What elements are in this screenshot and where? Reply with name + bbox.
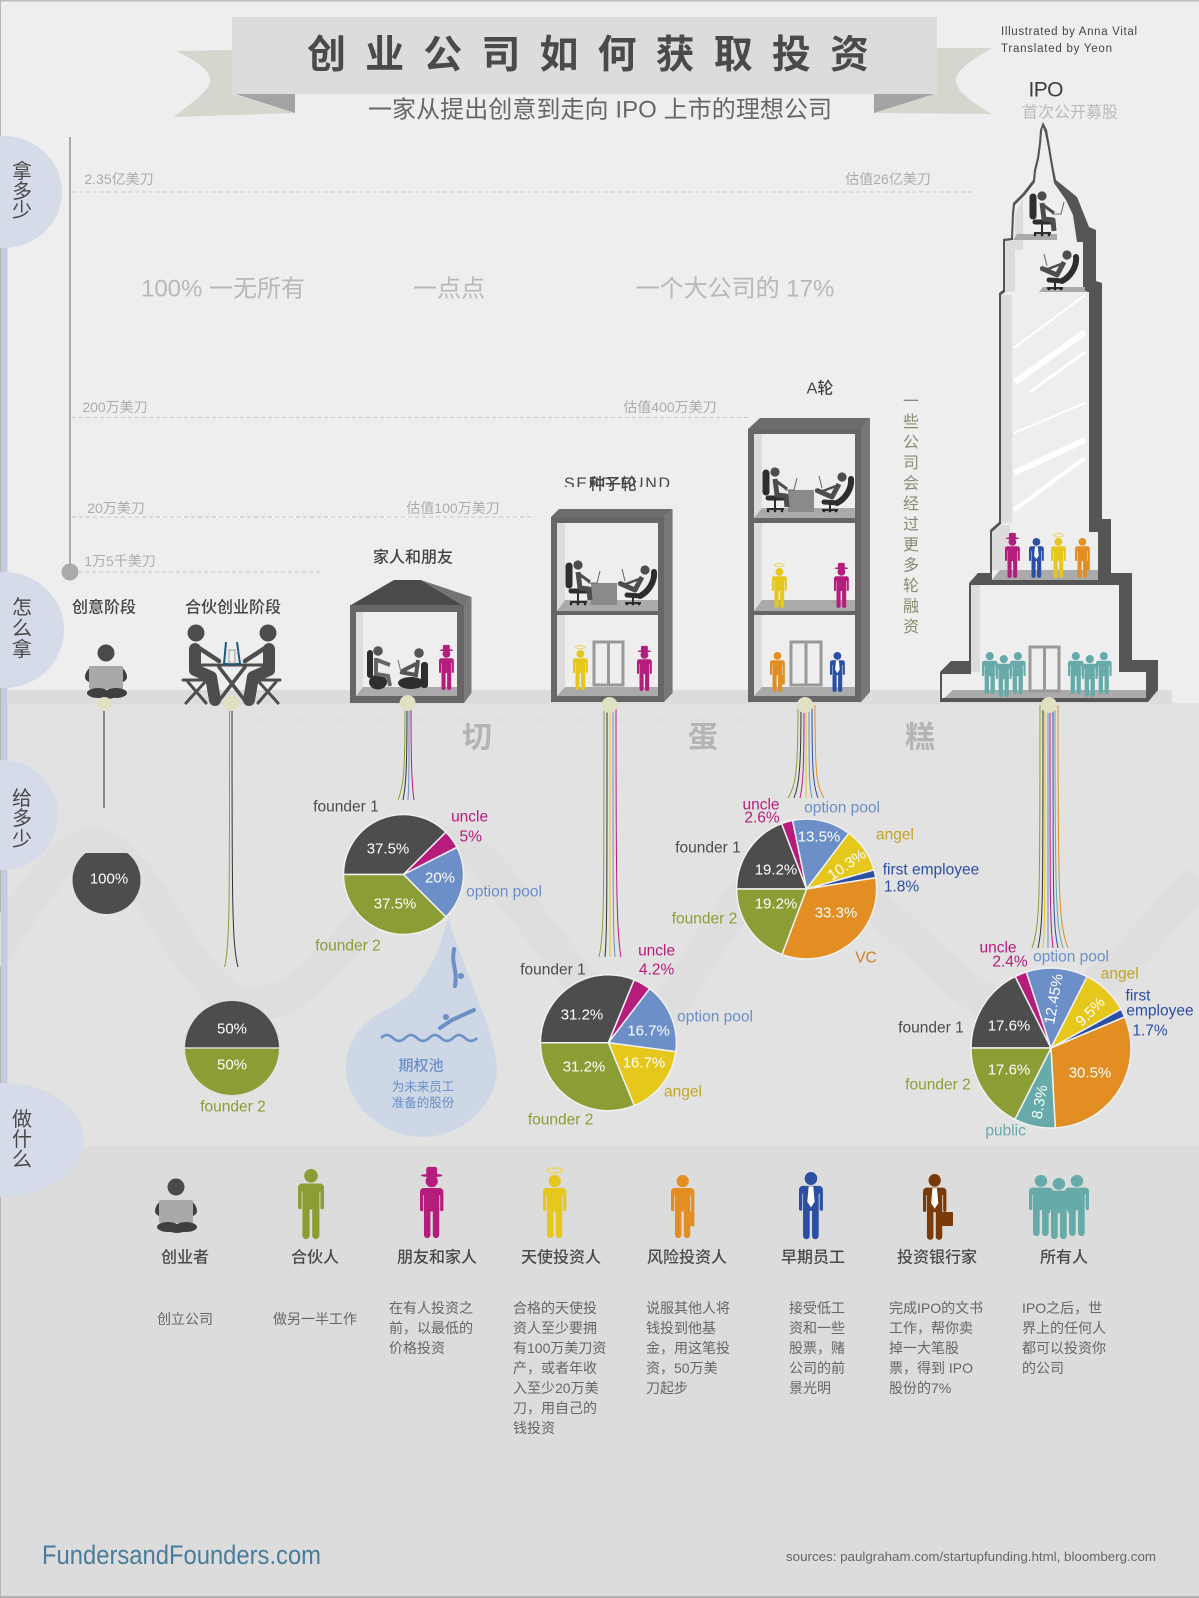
description: 合格的天使投 xyxy=(513,1300,597,1316)
funding amount labels: 1万5千美刀 xyxy=(84,553,156,569)
building: seed xyxy=(551,509,673,702)
pie: seed stage: 16.7% xyxy=(627,1022,670,1040)
desk xyxy=(788,490,814,512)
stage label: 合伙创业阶段 xyxy=(185,598,281,616)
description: 说服其他人将 xyxy=(646,1300,730,1316)
option pool title: 期权池 xyxy=(398,1058,444,1074)
description: 刀起步 xyxy=(646,1380,688,1396)
funding amount labels: 20万美刀 xyxy=(87,500,145,516)
option pool drop xyxy=(346,917,497,1137)
person: right founder on chair xyxy=(398,648,428,689)
description: 钱投到他基 xyxy=(646,1320,716,1336)
streams: co-founder xyxy=(225,705,238,967)
side tab: how to get xyxy=(0,572,64,688)
pie: series A stage: 10.3% xyxy=(825,846,869,884)
labels: first xyxy=(1126,988,1151,1004)
person: angel xyxy=(573,646,588,690)
funding amount labels: 200万美刀 xyxy=(82,399,148,415)
stage: IPO xyxy=(940,78,1158,702)
labels: employee xyxy=(1126,1002,1194,1020)
labels: VC xyxy=(855,950,877,966)
description xyxy=(646,1300,730,1396)
heading: 合伙人 xyxy=(291,1248,339,1266)
stage label: A轮 xyxy=(807,380,833,398)
pie: seed stage: 31.2% xyxy=(563,1058,605,1076)
side tab: how to get: 拿 xyxy=(12,637,32,661)
person: angel xyxy=(1051,534,1066,578)
pie: family stage: 37.5% xyxy=(367,840,409,858)
ribbon right fold xyxy=(874,94,934,113)
person: employee xyxy=(830,652,845,692)
pie: series A stage: 33.3% xyxy=(815,904,857,922)
labels: 2.6% xyxy=(744,810,780,826)
equity kept: 17 percent: 一个大公司的 17% xyxy=(636,276,834,302)
stage: series A xyxy=(748,380,870,702)
labels: 4.2% xyxy=(639,962,674,978)
labels: first employee xyxy=(883,862,979,878)
icon: co-founder xyxy=(298,1169,324,1239)
section heading: cut the cake: 蛋 xyxy=(688,722,718,754)
person: founder at desk xyxy=(1033,191,1064,236)
option pool description: 为未来员工 xyxy=(392,1080,454,1094)
pie: series A stage: 19.2% xyxy=(755,896,797,912)
section heading: cut the cake: 切 xyxy=(462,722,492,754)
description: 创立公司 xyxy=(157,1311,213,1327)
note: more rounds: 一 xyxy=(903,394,919,410)
description: 票，得到 IPO xyxy=(889,1360,973,1376)
legend: VC xyxy=(646,1175,730,1396)
stage label: 种子轮 xyxy=(589,476,637,494)
description: 景光明 xyxy=(789,1380,831,1396)
description: 前，以最低的 xyxy=(389,1320,473,1336)
door xyxy=(594,642,623,685)
labels: 5% xyxy=(459,828,482,846)
labels: 1.8% xyxy=(884,878,919,896)
left vertical bar xyxy=(1,245,8,1090)
description: 价格投资 xyxy=(389,1340,445,1356)
labels: founder 1 xyxy=(898,1020,964,1036)
pie: IPO stage xyxy=(898,940,1194,1140)
heading: 创业者 xyxy=(161,1248,209,1266)
description xyxy=(789,1300,845,1396)
labels: angel xyxy=(1101,966,1139,982)
description xyxy=(513,1300,606,1436)
labels: 2.4% xyxy=(992,954,1028,970)
side tab: how much give: 多 xyxy=(12,807,32,830)
funding axis xyxy=(62,137,78,580)
labels: option pool xyxy=(677,1008,753,1026)
stage: co-founder xyxy=(183,598,281,703)
description: 的公司 xyxy=(1022,1360,1064,1376)
side tab: what they do: 么 xyxy=(12,1149,32,1171)
dashed funding levels xyxy=(72,192,975,572)
ribbon right tail xyxy=(874,48,992,114)
labels: founder 1 xyxy=(675,840,741,856)
pie: IPO stage: 9.5% xyxy=(1072,994,1109,1030)
section heading: cut the cake: 糕 xyxy=(905,722,935,754)
labels: founder 2 xyxy=(672,910,737,928)
labels: angel xyxy=(664,1084,702,1100)
streams: seed xyxy=(599,705,621,957)
heading: 投资银行家 xyxy=(897,1248,977,1266)
description: 完成IPO的文书 xyxy=(889,1300,983,1316)
label: founder 2 xyxy=(200,1098,266,1116)
icon: everyone xyxy=(1029,1175,1089,1239)
heading: 所有人 xyxy=(1040,1248,1088,1266)
description: 都可以投资你 xyxy=(1022,1340,1106,1356)
funding amount labels: 2.35亿美刀 xyxy=(84,171,154,187)
funding amount labels: 估值26亿美刀 xyxy=(845,171,931,187)
funding amount labels xyxy=(82,171,931,569)
pie: co-founder stage: 50% xyxy=(217,1056,247,1074)
labels: uncle xyxy=(979,940,1017,956)
icon: swimmer xyxy=(440,1010,474,1028)
person: left founder on ottoman xyxy=(367,646,390,690)
building: skyscraper xyxy=(940,122,1158,702)
labels: option pool xyxy=(1033,948,1109,966)
description xyxy=(889,1300,983,1396)
labels xyxy=(313,798,542,954)
stage: idea xyxy=(72,598,136,699)
person: uncle with hat xyxy=(439,645,454,690)
title ribbon xyxy=(174,17,992,117)
legend: everyone xyxy=(1022,1175,1106,1376)
stage label overlap: SEED FUND xyxy=(564,476,670,492)
floors xyxy=(944,234,1146,698)
icon: founder xyxy=(155,1178,197,1233)
note: more rounds: 些 xyxy=(903,413,919,431)
person: employee xyxy=(1029,538,1044,578)
description: 资和一些 xyxy=(789,1320,845,1336)
note: more rounds xyxy=(903,394,919,636)
note: more rounds: 更 xyxy=(903,537,919,554)
funding amount labels: 估值400万美刀 xyxy=(623,399,717,415)
option pool description: 准备的股份 xyxy=(392,1095,455,1110)
description: 在有人投资之 xyxy=(389,1300,473,1316)
side tab: what they do xyxy=(0,1083,84,1197)
labels: option pool xyxy=(466,884,542,900)
side tab: how to get: 么 xyxy=(12,618,32,640)
person: VC xyxy=(1075,538,1090,578)
pie: series A stage xyxy=(672,796,979,966)
glass stripes xyxy=(1014,295,1085,510)
icon: uncle xyxy=(420,1167,443,1238)
description: 界上的任何人 xyxy=(1022,1320,1106,1336)
IPO heading: IPO xyxy=(1028,78,1064,102)
title: 创业公司如何获取投资 xyxy=(307,34,869,77)
note: more rounds: 司 xyxy=(903,455,919,472)
labels: public xyxy=(985,1122,1026,1140)
people: public group left xyxy=(982,652,1026,697)
description: 做另一半工作 xyxy=(273,1311,357,1327)
floor band xyxy=(7,690,1172,704)
footer brand: FundersandFounders.com xyxy=(42,1540,321,1570)
person: uncle xyxy=(637,646,652,691)
icon: founder with laptop xyxy=(85,644,127,699)
stage: seed fund xyxy=(551,476,673,702)
description: 金，用这笔投 xyxy=(646,1340,730,1356)
person: founder reclining xyxy=(1040,250,1076,290)
note: more rounds: 过 xyxy=(903,516,919,534)
equity kept: a little: 一点点 xyxy=(413,276,485,302)
description: 接受低工 xyxy=(789,1300,845,1316)
note: more rounds: 多 xyxy=(903,556,919,574)
note: more rounds: 公 xyxy=(903,434,919,452)
stage: family and friends xyxy=(350,548,472,703)
side tab: what they do: 什 xyxy=(12,1128,32,1151)
stream origin dots xyxy=(98,695,1057,713)
option pool description xyxy=(392,1080,455,1110)
description: 公司的前 xyxy=(789,1360,845,1376)
description: 股份的7% xyxy=(889,1380,951,1396)
pie: idea stage: 100% xyxy=(90,870,128,888)
labels: founder 1 xyxy=(520,962,586,978)
icon: VC xyxy=(671,1175,694,1238)
person: angel xyxy=(772,564,787,608)
labels: 1.7% xyxy=(1132,1022,1168,1040)
subtitle: 一家从提出创意到走向 IPO 上市的理想公司 xyxy=(368,96,832,124)
streams: series A xyxy=(788,705,824,798)
description: 有100万美刀资 xyxy=(513,1340,606,1356)
credits: Illustrated by Anna Vital xyxy=(1001,26,1137,38)
funding amount labels: 估值100万美刀 xyxy=(406,500,500,516)
labels xyxy=(672,796,979,966)
description: IPO之后，世 xyxy=(1022,1300,1102,1316)
note: more rounds: 会 xyxy=(903,474,919,492)
pie: seed stage xyxy=(520,942,753,1128)
note: more rounds: 经 xyxy=(903,495,919,513)
icon: waves xyxy=(381,1035,477,1041)
pie: IPO stage: 17.6% xyxy=(988,1062,1030,1078)
pie: family stage: 20% xyxy=(425,870,455,886)
pie: IPO stage: 8.3% xyxy=(1029,1084,1051,1120)
legend: early employee xyxy=(781,1172,845,1396)
heading: 朋友和家人 xyxy=(397,1248,477,1266)
note: more rounds: 融 xyxy=(903,598,919,616)
description: 资人至少要拥 xyxy=(513,1320,597,1336)
labels: uncle xyxy=(451,808,488,826)
credits xyxy=(1001,26,1137,55)
side tab: how much give: 少 xyxy=(12,828,32,851)
legend: co-founder xyxy=(273,1169,357,1327)
icon: two founders at table xyxy=(183,624,280,703)
legend: investment banker xyxy=(889,1174,983,1396)
icon: angel xyxy=(543,1168,566,1238)
person: VC xyxy=(770,652,785,692)
description: 刀，用自己的 xyxy=(513,1400,597,1416)
door xyxy=(1030,647,1059,691)
legend: founder xyxy=(155,1178,213,1327)
side tab: how much get: 拿 xyxy=(12,159,32,183)
building: series A xyxy=(748,418,870,702)
pie: series A stage: 19.2% xyxy=(755,862,797,878)
equity kept: nothing: 100% 一无所有 xyxy=(141,276,305,302)
stage label: 创意阶段 xyxy=(72,598,136,616)
note: more rounds: 轮 xyxy=(903,577,919,595)
pie: seed stage: 16.7% xyxy=(623,1054,665,1072)
pie: co-founder stage: 50% xyxy=(217,1020,247,1038)
description: 资，50万美 xyxy=(646,1360,718,1376)
description: 产，或者年收 xyxy=(513,1360,597,1376)
person: uncle xyxy=(1005,533,1020,578)
labels: option pool xyxy=(804,800,880,816)
note: more rounds: 资 xyxy=(903,618,919,636)
description: 掉一大笔股 xyxy=(889,1340,959,1356)
pie: IPO stage: 30.5% xyxy=(1069,1064,1111,1082)
side tab: how to get: 怎 xyxy=(12,596,32,619)
ribbon left fold xyxy=(235,94,295,113)
pie: IPO stage: 17.6% xyxy=(988,1018,1030,1034)
pie: series A stage: 13.5% xyxy=(798,828,840,846)
side tab: how much give xyxy=(0,760,58,870)
heading: 风险投资人 xyxy=(647,1248,727,1266)
section heading: cut the cake xyxy=(462,722,935,754)
side tab: what they do: 做 xyxy=(12,1108,32,1131)
person: founder at desk xyxy=(569,560,600,605)
icon: banker xyxy=(923,1174,953,1240)
description xyxy=(1022,1300,1106,1376)
description xyxy=(389,1300,473,1356)
IPO subheading: 首次公开募股 xyxy=(1022,104,1118,122)
pie: IPO stage: 12.45% xyxy=(1041,972,1067,1026)
pie: family stage xyxy=(313,798,542,954)
faint mountain ribbon behind pies xyxy=(0,843,1199,1040)
streams: family xyxy=(398,705,414,800)
labels: founder 2 xyxy=(905,1076,971,1094)
person: founder at desk xyxy=(766,467,797,512)
labels: uncle xyxy=(638,942,675,960)
streams: idea xyxy=(103,705,105,808)
person: uncle xyxy=(834,563,849,608)
labels: uncle xyxy=(742,796,780,814)
labels: founder 2 xyxy=(315,938,381,954)
labels: founder 2 xyxy=(528,1112,593,1128)
ribbon left tail xyxy=(174,50,295,117)
side tab: how much get xyxy=(0,136,62,248)
stage label: 家人和朋友 xyxy=(373,548,453,566)
description: 股票，赌 xyxy=(789,1340,845,1356)
side tab: how much get: 少 xyxy=(12,199,32,222)
labels: angel xyxy=(876,826,914,844)
description: 工作，帮你卖 xyxy=(889,1320,973,1336)
pie: idea stage xyxy=(72,853,140,914)
credits: Translated by Yeon xyxy=(1001,43,1112,55)
pie: seed stage: 31.2% xyxy=(561,1006,603,1024)
pie: co-founder stage xyxy=(185,1001,279,1116)
description: 入至少20万美 xyxy=(513,1380,599,1396)
legend: friends and family xyxy=(389,1167,477,1356)
person: founder reclining xyxy=(815,472,851,512)
person: founder reclining xyxy=(618,565,654,605)
icon: employee xyxy=(799,1172,823,1239)
icon: diver xyxy=(453,949,464,986)
heading: 天使投资人 xyxy=(521,1248,601,1266)
labels: founder 1 xyxy=(313,798,379,816)
labels xyxy=(520,942,753,1128)
pie: family stage: 37.5% xyxy=(374,896,416,912)
footer sources: sources: paulgraham.com/startupfunding.html, bloomberg.com xyxy=(786,1550,1156,1564)
side tab: how much get: 多 xyxy=(12,180,32,203)
streams: IPO xyxy=(1032,705,1068,948)
building: house xyxy=(350,580,472,703)
ribbon panel xyxy=(232,17,937,94)
desk xyxy=(591,583,617,605)
description: 钱投资 xyxy=(513,1420,555,1436)
side tab: how much give: 给 xyxy=(12,787,32,810)
labels xyxy=(898,940,1194,1140)
people: public group right xyxy=(1068,652,1112,697)
heading: 早期员工 xyxy=(781,1248,845,1266)
door xyxy=(791,642,821,685)
legend: angel xyxy=(513,1168,606,1436)
